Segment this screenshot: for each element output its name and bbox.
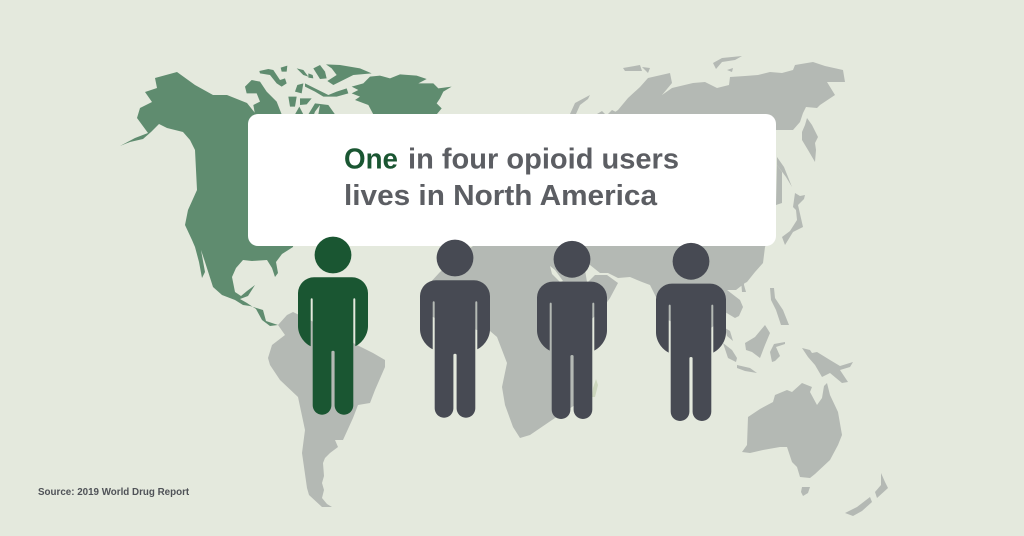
- icon: green person: [298, 237, 368, 415]
- map: South America: [268, 312, 385, 507]
- map: Eurasia, Africa and Oceania: [428, 56, 888, 516]
- panel: headline card: [248, 114, 776, 246]
- icon: grey person 2: [420, 240, 490, 418]
- heading: in four opioid users: [408, 144, 679, 176]
- heading: One: [344, 144, 398, 176]
- map: Red Sea gap: [550, 266, 563, 282]
- map: Madagascar: [592, 379, 598, 397]
- heading: [344, 144, 679, 212]
- icon: grey person 4: [656, 243, 726, 421]
- icon: grey person 3: [537, 241, 607, 419]
- world map: [120, 56, 888, 516]
- source note: Source: 2019 World Drug Report: [38, 487, 190, 498]
- map: North America: [120, 64, 452, 326]
- heading: lives in North America: [344, 180, 658, 212]
